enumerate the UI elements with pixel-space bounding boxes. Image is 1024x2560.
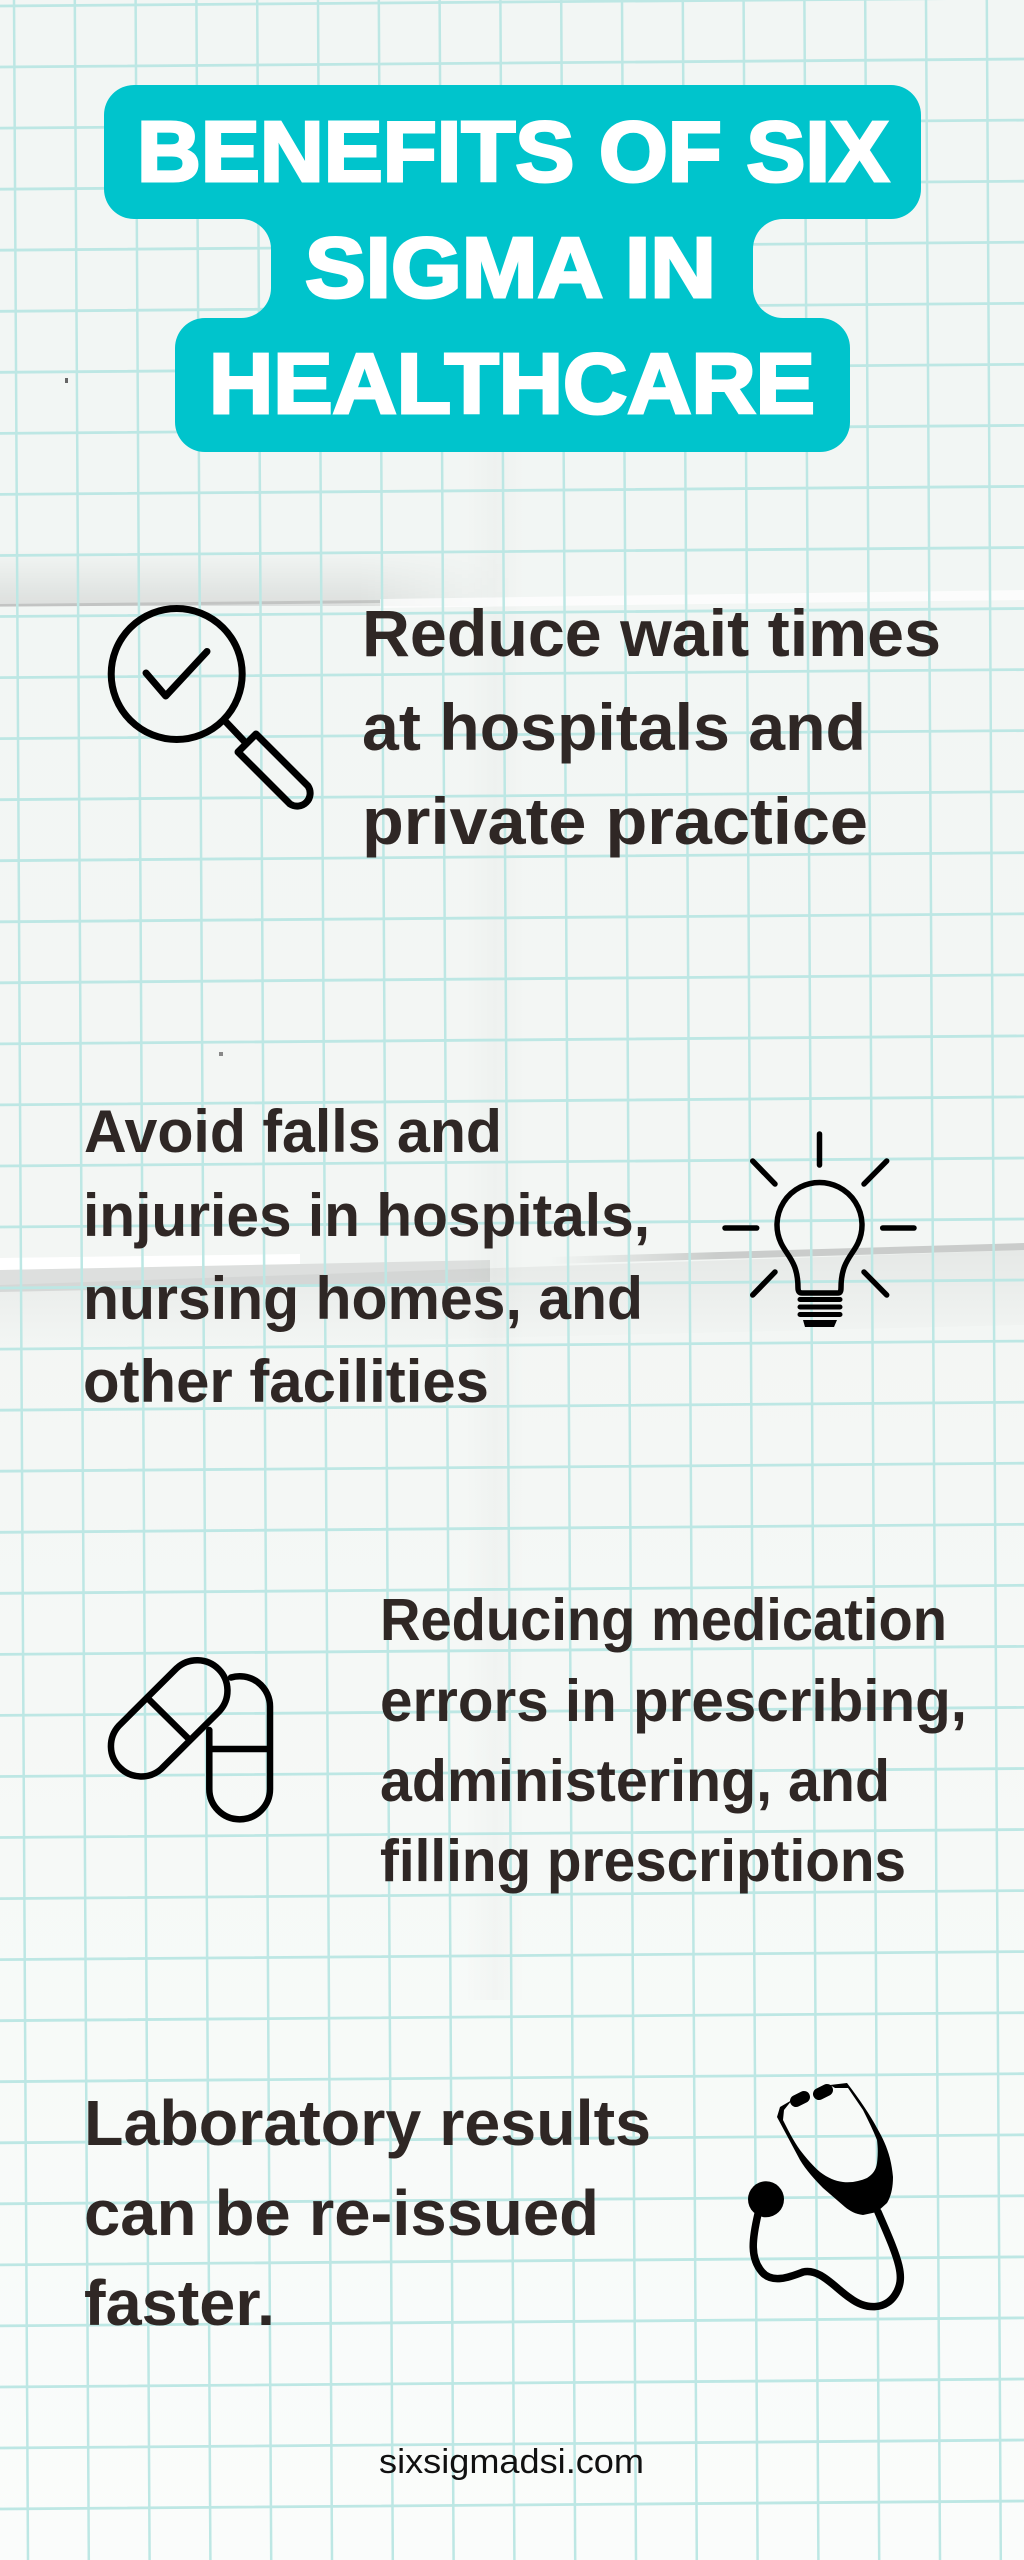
benefit 1 text: Reduce wait times <box>362 596 941 670</box>
title text: HEALTHCARE <box>209 337 815 432</box>
benefit 4 text <box>84 2087 651 2339</box>
bulb outline <box>777 1182 862 1293</box>
headset <box>777 2083 893 2215</box>
benefit 4 text: Laboratory results <box>84 2087 651 2159</box>
screw base <box>800 1300 840 1314</box>
chest piece <box>748 2181 784 2217</box>
benefit 3 text: administering, and <box>380 1748 890 1814</box>
benefit 1 text <box>362 596 941 858</box>
icon: stethoscope <box>748 2083 900 2307</box>
title text: SIGMA IN <box>305 221 716 316</box>
paper background <box>0 378 1024 1331</box>
benefit 4 text: can be re-issued <box>84 2177 599 2249</box>
website footer: sixsigmadsi.com <box>379 2443 644 2481</box>
benefit 3 text: Reducing medication <box>380 1587 947 1653</box>
benefit 1 text: private practice <box>362 784 868 858</box>
tilted capsule <box>111 1660 227 1776</box>
benefit 3 text: errors in prescribing, <box>380 1668 967 1734</box>
ear tips <box>796 2090 827 2101</box>
benefit 4 text: faster. <box>84 2267 275 2339</box>
title banner <box>104 85 921 452</box>
benefit 2 text: nursing homes, and <box>83 1265 643 1332</box>
benefit 3 text: filling prescriptions <box>380 1828 906 1894</box>
icon: magnifying glass with check <box>111 608 310 806</box>
benefit 2 text: Avoid falls and <box>84 1098 502 1165</box>
rays <box>725 1134 914 1295</box>
upright capsule <box>209 1676 270 1819</box>
benefit 1 text: at hospitals and <box>362 690 866 764</box>
title background shape <box>104 85 921 452</box>
title text <box>137 105 889 432</box>
benefit 2 text <box>83 1098 650 1415</box>
benefit 2 text: other facilities <box>83 1348 489 1415</box>
title text: BENEFITS OF SIX <box>137 105 889 200</box>
tube <box>753 2212 900 2307</box>
icon: light bulb <box>725 1134 914 1327</box>
benefit 2 text: injuries in hospitals, <box>83 1182 650 1249</box>
benefit 3 text <box>380 1587 967 1894</box>
icon: medicine capsules <box>111 1660 270 1819</box>
